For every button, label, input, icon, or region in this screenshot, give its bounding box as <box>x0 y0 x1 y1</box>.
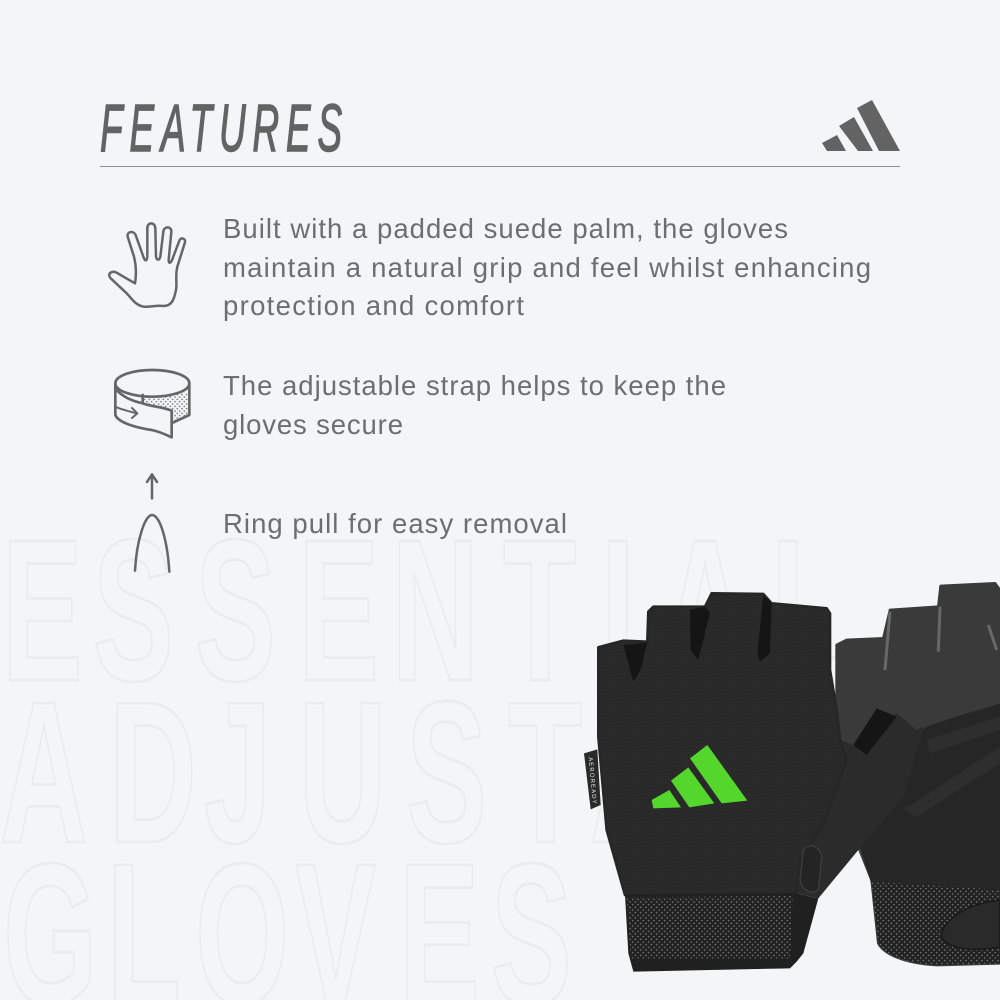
front glove, back of hand <box>598 593 847 895</box>
text: padded palm <box>223 213 871 321</box>
text: padded palm: maintain a natural grip and feel whilst enhancing <box>223 252 871 283</box>
text: padded palm: protection and comfort <box>223 290 524 321</box>
ring pull loop on glove <box>800 846 822 892</box>
background outlined text <box>0 498 845 1000</box>
icon: strap <box>115 370 189 437</box>
finger gaps <box>623 595 772 682</box>
label tag AEROREADY <box>584 749 601 809</box>
ghost word: ESSENTIAL: ESSENTIAL <box>2 498 845 724</box>
adidas logo, green <box>652 745 747 808</box>
text: adjustable strap: The adjustable strap helps to keep the <box>223 370 726 401</box>
ghost word: ADJUSTABLE: ADJUSTA <box>0 660 677 886</box>
product photo: pair of gloves <box>584 583 1000 972</box>
icon: hand <box>109 223 185 307</box>
text: adjustable strap <box>223 370 726 440</box>
text: adjustable strap: gloves secure <box>223 409 403 440</box>
label tag AEROREADY: AEROREADY <box>587 757 597 804</box>
icon: ring pull with arrow <box>135 474 169 572</box>
title: FEATURES <box>100 92 342 166</box>
text: padded palm: Built with a padded suede palm, the gloves <box>223 213 788 244</box>
back glove, palm side <box>797 583 1000 965</box>
adidas logo, grey <box>822 100 900 151</box>
cuff strap <box>625 893 818 972</box>
text: ring pull: Ring pull for easy removal <box>223 508 567 539</box>
